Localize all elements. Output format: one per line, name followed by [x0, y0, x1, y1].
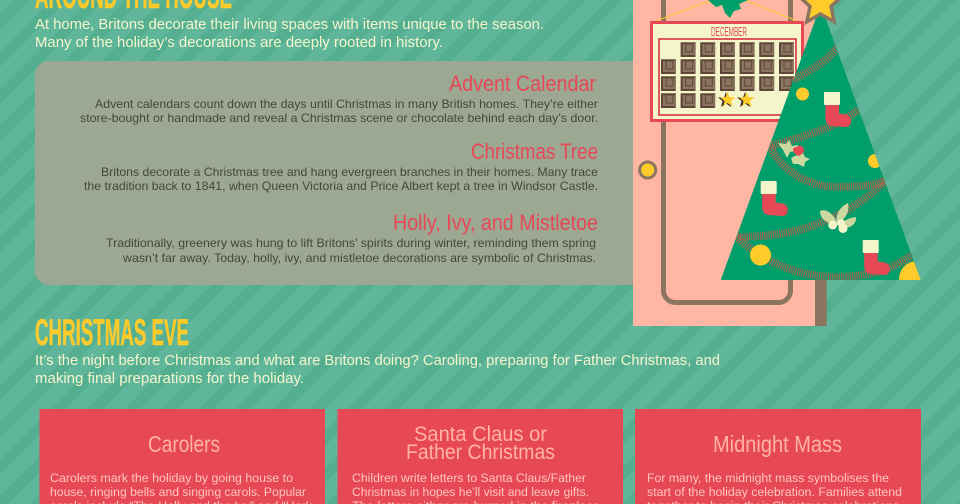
- icon: door knob: [640, 162, 656, 178]
- text: christmas tree: [84, 165, 598, 193]
- calendar doors: [661, 42, 794, 108]
- intro text: christmas eve: It’s the night before Christmas and what are Britons doing? Caroling, preparing for Father Christmas, and: [35, 352, 720, 369]
- card: carolers: [40, 409, 325, 504]
- card heading: carolers: Carolers: [148, 431, 220, 457]
- calendar month: DECEMBER: [711, 25, 747, 39]
- heading: christmas eve: CHRISTMAS EVE: [35, 312, 189, 353]
- card: midnight mass: [635, 409, 921, 504]
- heading: advent calendar: Advent Calendar: [449, 71, 596, 96]
- stocking 2: [761, 181, 788, 216]
- card text: midnight mass: For many, the midnight mass symbolises the: [647, 471, 889, 485]
- panel: decorations: [35, 61, 645, 285]
- card heading: santa claus: Santa Claus or: [414, 423, 547, 446]
- illustration: door: [633, 0, 815, 326]
- intro text: around the house: Many of the holiday’s decorations are deeply rooted in history.: [35, 34, 443, 51]
- card text: santa claus: Christmas in hopes he’ll visit and leave gifts.: [352, 485, 589, 499]
- heading: holly, ivy, and mistletoe: Holly, Ivy, and Mistletoe: [393, 210, 598, 235]
- intro text: christmas eve: [35, 352, 720, 387]
- tree trunk: [815, 280, 827, 326]
- heading: christmas tree: Christmas Tree: [471, 139, 598, 164]
- text: advent calendar: [80, 97, 598, 125]
- card heading: midnight mass: Midnight Mass: [713, 431, 842, 457]
- text: holly, ivy, and mistletoe: Traditionally, greenery was hung to lift Britons’ spirits during winter, reminding them spring: [106, 236, 596, 250]
- card heading: santa claus: Father Christmas: [406, 441, 555, 464]
- card text: santa claus: [352, 471, 600, 504]
- card text: carolers: [50, 471, 313, 504]
- intro text: around the house: [35, 16, 544, 51]
- card text: carolers: house, ringing bells and singing carols. Popular: [50, 485, 306, 499]
- card text: midnight mass: [647, 471, 902, 504]
- stocking 1: [824, 92, 851, 127]
- text: christmas tree: Britons decorate a Christmas tree and hang evergreen branches in their homes. Many trace: [101, 165, 598, 179]
- tree body: [721, 5, 921, 280]
- text: holly, ivy, and mistletoe: wasn’t far away. Today, holly, ivy, and mistletoe decorations are symbolic of Christmas.: [122, 251, 596, 265]
- mistletoe decoration: [820, 203, 856, 233]
- ornaments: [750, 88, 921, 280]
- card text: midnight mass: start of the holiday celebration. Families attend: [647, 485, 902, 499]
- text: holly, ivy, and mistletoe: [106, 236, 596, 265]
- icon: wreath holly: [656, 0, 797, 21]
- stocking 3: [863, 240, 890, 275]
- intro text: christmas eve: making final preparations for the holiday.: [35, 370, 304, 387]
- calendar stars: [718, 92, 754, 107]
- intro text: around the house: At home, Britons decorate their living spaces with items unique to the season.: [35, 16, 544, 33]
- calendar: [652, 22, 802, 120]
- text: advent calendar: store-bought or handmade and reveal a Christmas scene or chocolate behind each day’s door.: [80, 111, 598, 125]
- text: christmas tree: the tradition back to 1841, when Queen Victoria and Price Albert kept a tree in Windsor Castle.: [84, 179, 598, 193]
- card text: santa claus: Children write letters to Santa Claus/Father: [352, 471, 586, 485]
- text: advent calendar: Advent calendars count down the days until Christmas in many British homes. They’re either: [95, 97, 598, 111]
- illustration: christmas tree: [721, 0, 935, 326]
- card text: carolers: Carolers mark the holiday by going house to: [50, 471, 293, 485]
- holly decoration: [778, 140, 810, 167]
- card heading: santa claus: [406, 423, 555, 464]
- garlands: [737, 46, 912, 277]
- card: santa claus: [338, 409, 623, 504]
- tree star: [802, 0, 839, 18]
